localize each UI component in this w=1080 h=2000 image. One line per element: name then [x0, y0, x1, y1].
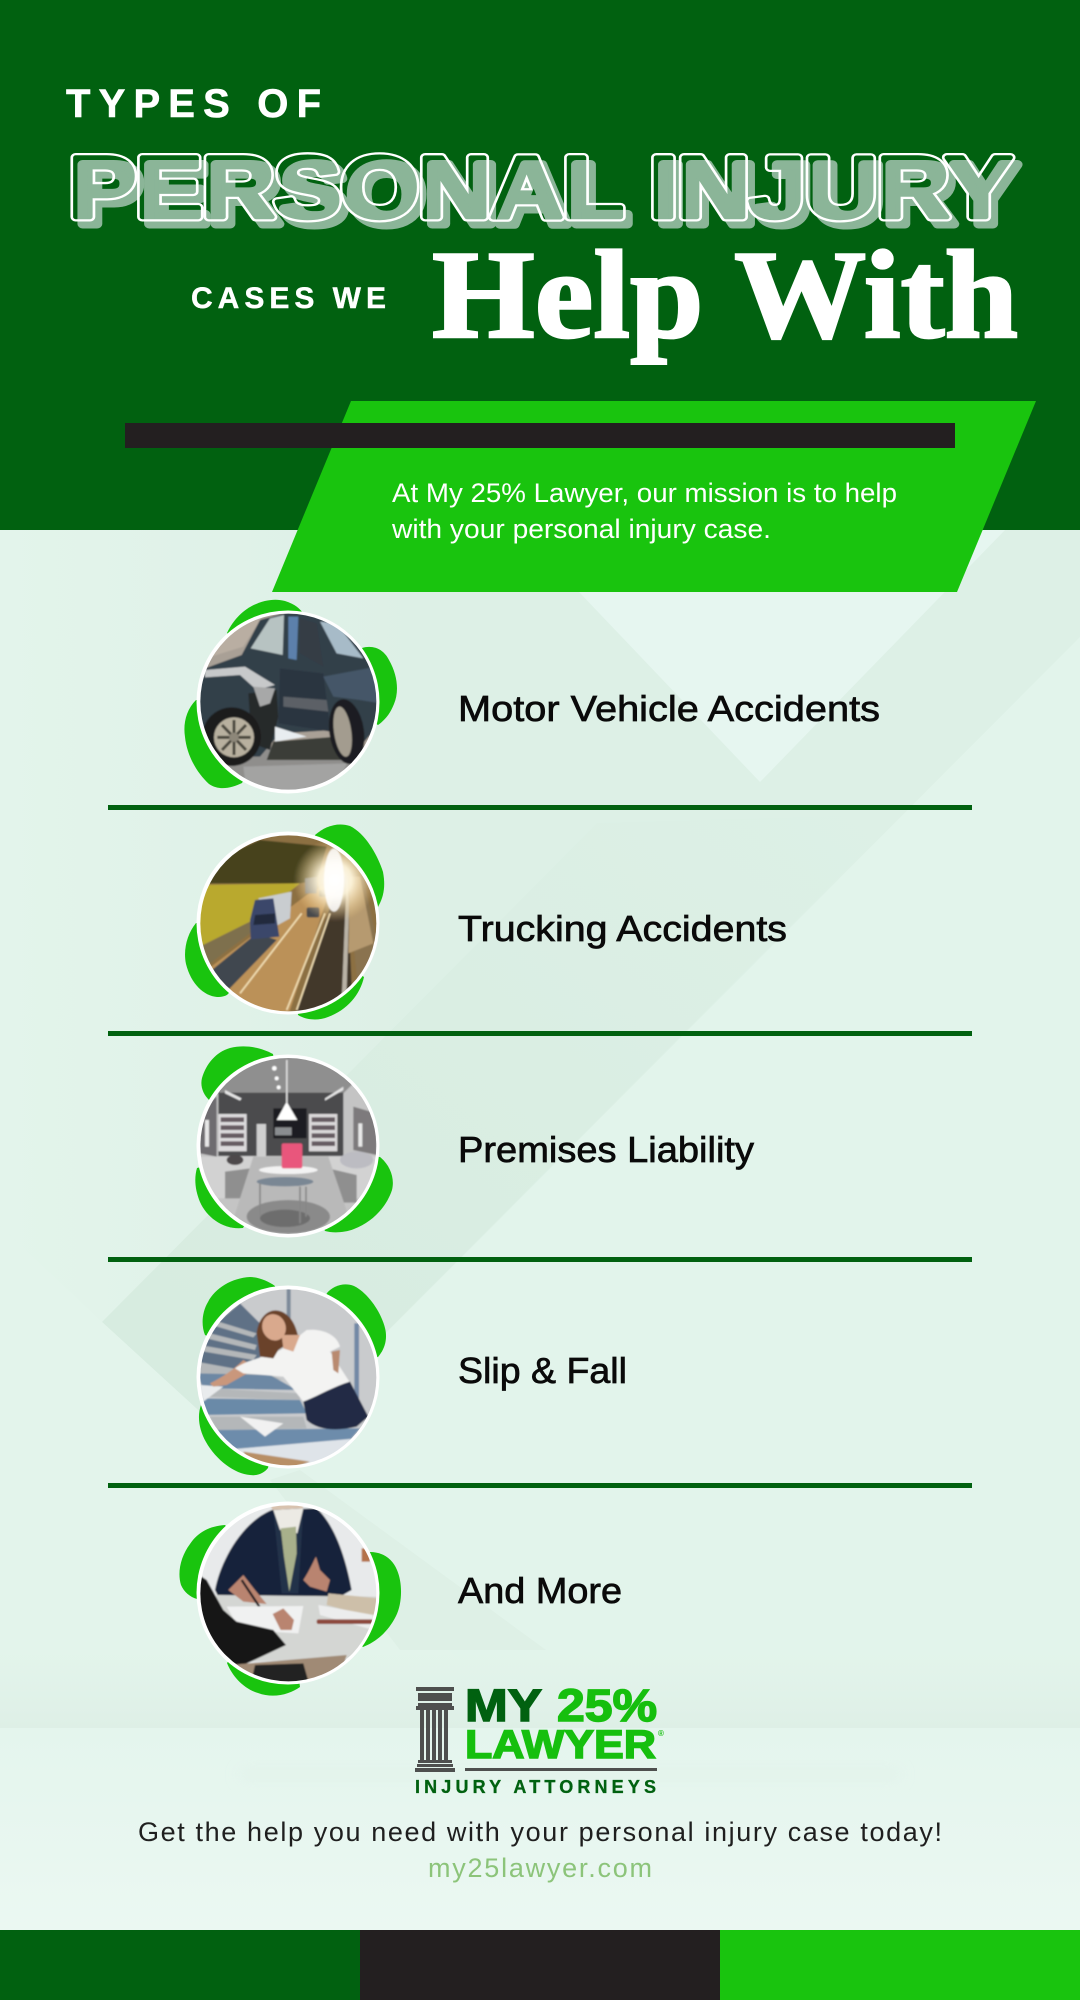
- row: slip and fall: [196, 1277, 627, 1475]
- footer colour bars: [0, 1930, 1080, 2000]
- row: and more: [179, 1502, 622, 1696]
- photo: woman slipping on stairs: [196, 1286, 383, 1473]
- icon: column: [415, 1687, 455, 1772]
- label: Motor Vehicle Accidents: [458, 688, 880, 729]
- mission text: [391, 478, 897, 544]
- logo wordmark: 25%: [557, 1680, 657, 1731]
- logo wordmark: MY: [465, 1680, 542, 1731]
- photo: highway truck: [196, 832, 383, 1020]
- photo: damaged car: [196, 610, 383, 797]
- icon: green blobs: [185, 824, 384, 1019]
- website: my25lawyer.com: [428, 1853, 652, 1883]
- mission panel: [125, 401, 1036, 592]
- title: [50, 82, 1050, 365]
- dividers: [108, 805, 972, 1488]
- logo: my 25% lawyer: [415, 1680, 664, 1797]
- heading: help with: Help With: [432, 226, 1018, 365]
- icon: green blobs: [179, 1525, 401, 1696]
- logo wordmark: ®: [658, 1729, 664, 1738]
- row: trucking accidents: [185, 824, 787, 1020]
- icon: green blobs: [184, 600, 397, 788]
- closing call to action: Get the help you need with your personal injury case today!: [138, 1817, 942, 1847]
- mission text: At My 25% Lawyer, our mission is to help: [392, 478, 897, 508]
- dark bar: [125, 423, 955, 448]
- label: Premises Liability: [458, 1129, 754, 1170]
- heading: personal injury: PERSONAL INJURY: [76, 147, 1019, 243]
- mission text: with your personal injury case.: [391, 514, 771, 544]
- background: mint geometric panel: [0, 530, 1080, 1930]
- heading: types of: TYPES OF: [66, 82, 321, 126]
- row: premises liability: [195, 1046, 754, 1243]
- logo wordmark: LAWYER: [465, 1723, 656, 1767]
- label: And More: [458, 1570, 622, 1611]
- photo: legal consultation: [196, 1502, 383, 1690]
- label: Trucking Accidents: [458, 908, 787, 949]
- label: Slip & Fall: [458, 1350, 627, 1391]
- logo tagline: INJURY ATTORNEYS: [415, 1777, 656, 1797]
- icon: green blobs: [199, 1277, 386, 1475]
- logo wordmark: [465, 1680, 664, 1767]
- row: motor vehicle accidents: [184, 600, 880, 797]
- heading: cases we: CASES WE: [191, 282, 386, 315]
- photo: retail store: [196, 1054, 383, 1243]
- icon: green blobs: [195, 1046, 393, 1232]
- header band: [0, 0, 1080, 530]
